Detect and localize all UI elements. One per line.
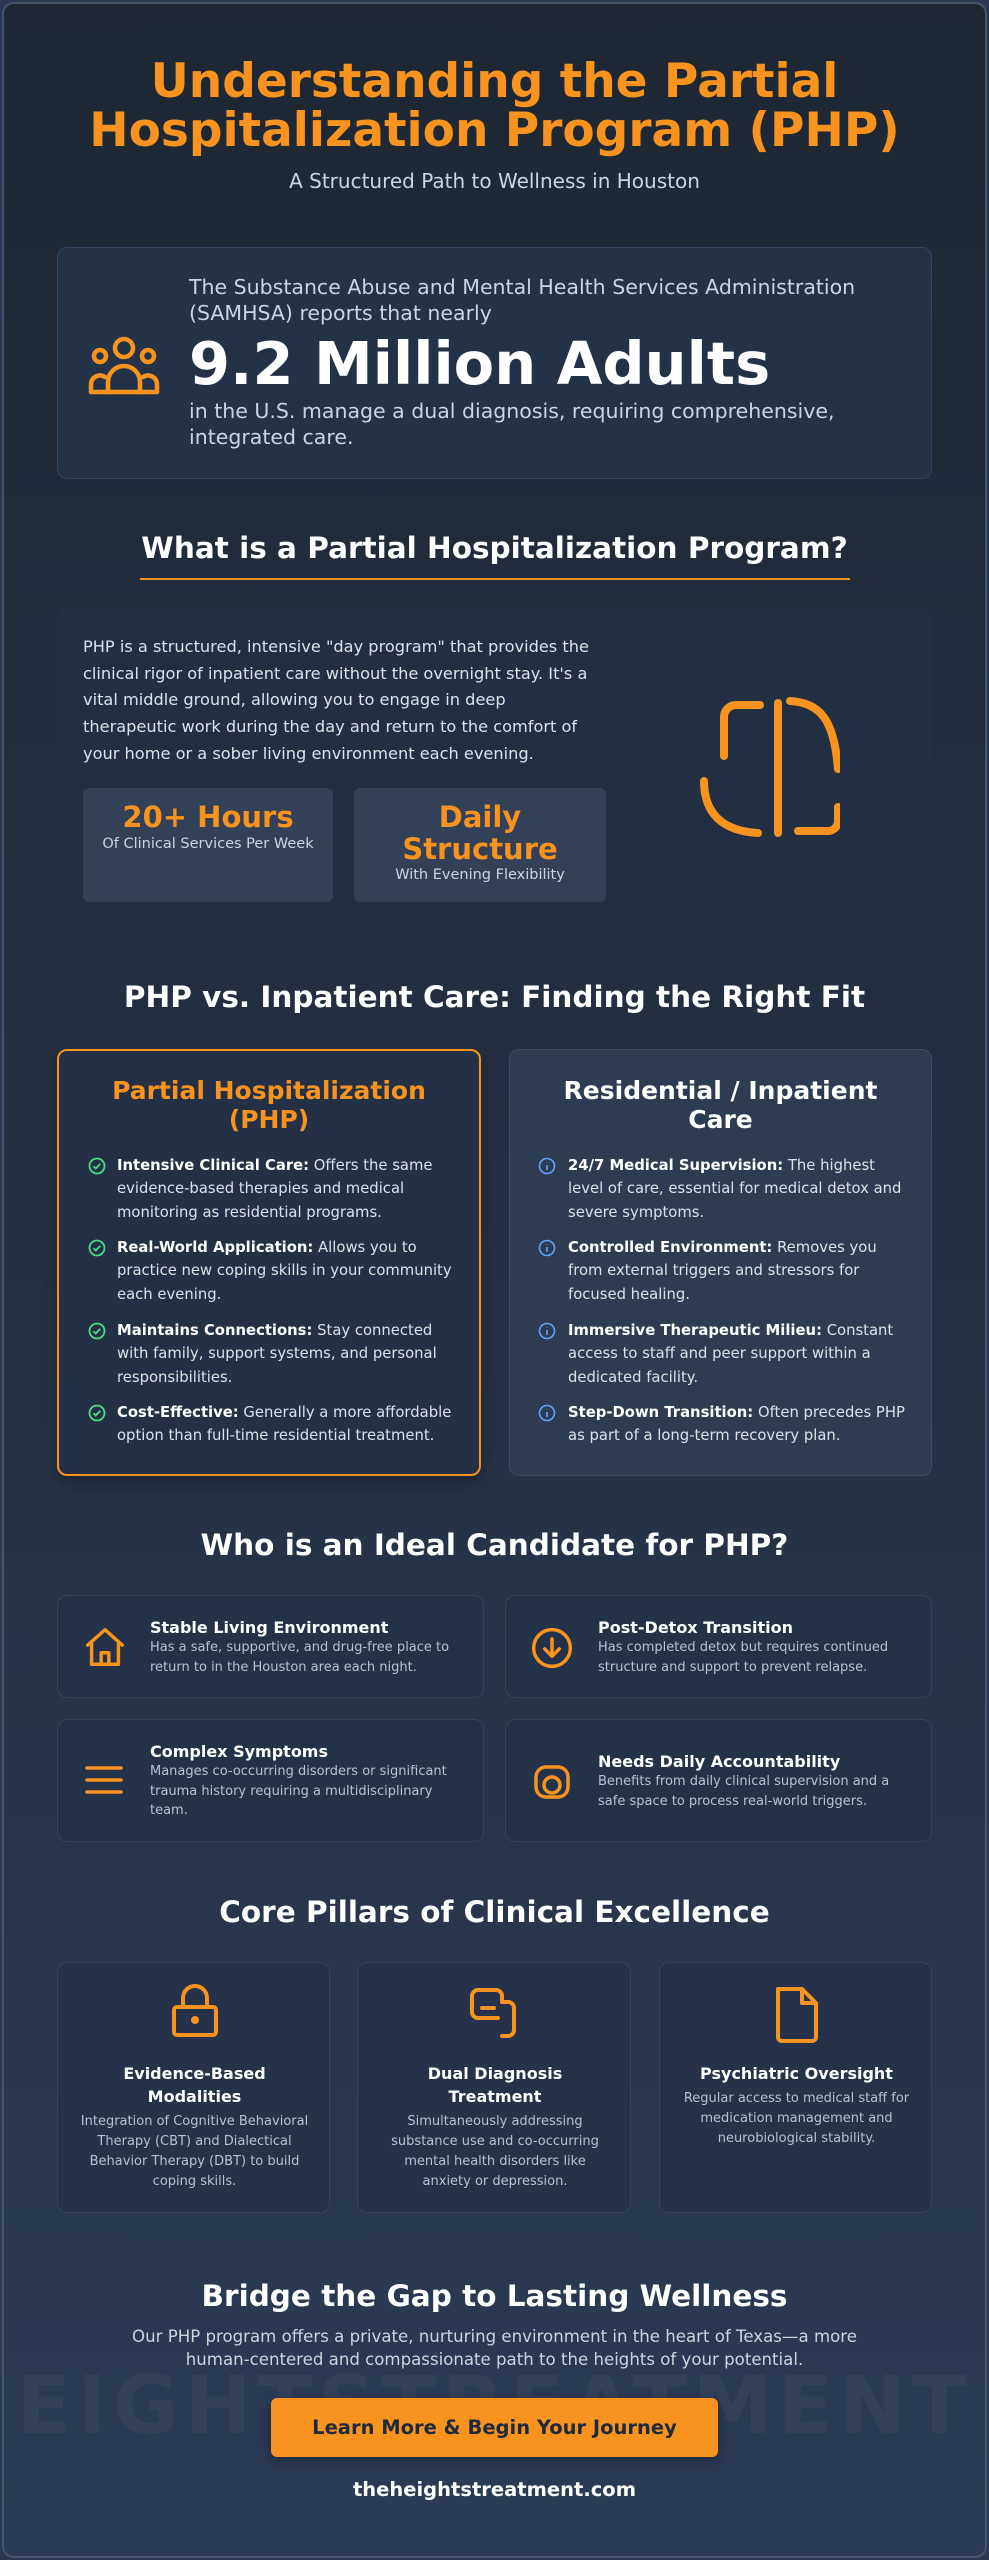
title (89, 54, 900, 158)
list items: Step-Down Transition: Often precedes PHP as part of a long-term recovery plan. (568, 1404, 905, 1444)
card: complex symptoms: Complex Symptoms (150, 1742, 328, 1761)
icon: lock (172, 1984, 218, 2037)
icon: chat (470, 1988, 516, 2038)
list items: Immersive Therapeutic Milieu: Constant access to staff and peer support within a dedicated facility. (568, 1322, 893, 1386)
card: post-detox: Has completed detox but requires continued structure and support to prevent relapse. (598, 1640, 888, 1674)
pillar: dual diagnosis: Treatment (449, 2087, 541, 2106)
icon: people (88, 336, 160, 394)
pillar: evidence-based (57, 1962, 330, 2213)
closing paragraph (132, 2327, 857, 2369)
stat: daily structure: Daily (439, 800, 521, 834)
list items (88, 1157, 452, 1444)
heading: ideal candidate: Who is an Ideal Candidate for PHP? (201, 1528, 788, 1562)
stat: daily structure: With Evening Flexibility (395, 867, 565, 883)
card: post-detox (505, 1595, 932, 1698)
button: CTA: Learn More & Begin Your Journey (312, 2416, 677, 2439)
list items: Intensive Clinical Care: Offers the same evidence-based therapies and medical monitoring as residential programs. (117, 1157, 433, 1221)
card: complex symptoms: Manages co-occurring disorders or significant trauma history requiring a multidisciplinary team. (150, 1764, 447, 1818)
button: CTA (271, 2398, 718, 2457)
icon: lines (85, 1766, 123, 1794)
paragraph: clinical rigor of inpatient care without the overnight stay. It's a (83, 664, 587, 683)
stat: 20+ hours: Of Clinical Services Per Week (102, 836, 314, 852)
card: stable living: Has a safe, supportive, and drug-free place to return to in the Houston area each night. (150, 1640, 449, 1674)
closing paragraph: human-centered and compassionate path to the heights of your potential. (186, 2350, 803, 2369)
card title (564, 1076, 877, 1134)
stat text: The Substance Abuse and Mental Health Services Administration (189, 275, 855, 299)
card title: Care (688, 1105, 753, 1134)
list items: Cost-Effective: Generally a more affordable option than full-time residential treatment. (117, 1404, 451, 1444)
stat text: integrated care. (189, 425, 353, 449)
card title: Partial Hospitalization (112, 1076, 426, 1105)
icon: house (86, 1628, 124, 1666)
title: Understanding the Partial (151, 54, 838, 109)
card title: (PHP) (229, 1105, 309, 1134)
pillar: evidence-based: Evidence-Based (123, 2064, 266, 2083)
icon: arrow down circle (532, 1628, 572, 1668)
paragraph: your home or a sober living environment each evening. (83, 744, 534, 763)
pillar: dual diagnosis: Simultaneously addressing substance use and co-occurring mental health disorders like anxiety or depression. (391, 2114, 599, 2189)
pillar: evidence-based: Modalities (148, 2087, 241, 2106)
closing paragraph: Our PHP program offers a private, nurturing environment in the heart of Texas—a more (132, 2327, 857, 2346)
list items: Real-World Application: Allows you to practice new coping skills in your community each evening. (117, 1239, 452, 1303)
stat: daily structure: Structure (402, 832, 558, 866)
list items: 24/7 Medical Supervision: The highest level of care, essential for medical detox and severe symptoms. (568, 1157, 901, 1221)
url: theheightstreatment.com (353, 2478, 636, 2501)
list items: Maintains Connections: Stay connected with family, support systems, and personal responsibilities. (117, 1322, 437, 1386)
panel: what is PHP (57, 608, 932, 927)
stat: 20+ hours (83, 788, 333, 902)
card title: Residential / Inpatient (564, 1076, 877, 1105)
stat: 20+ hours: 20+ Hours (122, 800, 294, 834)
icon: badge (534, 1765, 570, 1799)
subtitle: A Structured Path to Wellness in Houston (289, 169, 700, 193)
card: accountability: Needs Daily Accountability (598, 1752, 840, 1771)
stat text: (SAMHSA) reports that nearly (189, 301, 492, 325)
pillar: dual diagnosis: Dual Diagnosis (428, 2064, 562, 2083)
heading: bridge: Bridge the Gap to Lasting Wellness (202, 2279, 787, 2313)
panel: residential card (509, 1049, 932, 1476)
stat text: in the U.S. manage a dual diagnosis, requiring comprehensive, (189, 399, 834, 423)
title: Hospitalization Program (PHP) (89, 103, 900, 158)
paragraph: vital middle ground, allowing you to engage in deep (83, 690, 506, 709)
pillar: psychiatric: Regular access to medical staff for medication management and neurobiological stability. (684, 2091, 909, 2146)
heading: vs: PHP vs. Inpatient Care: Finding the Right Fit (124, 980, 865, 1014)
heading: core pillars: Core Pillars of Clinical Excellence (219, 1895, 770, 1929)
card: accountability (505, 1719, 932, 1842)
list items (538, 1157, 905, 1444)
paragraph: therapeutic work during the day and return to the comfort of (83, 717, 577, 736)
pillar: evidence-based: Integration of Cognitive Behavioral Therapy (CBT) and Dialectical Behavior Therapy (DBT) to build coping skills. (81, 2114, 308, 2189)
paragraph: PHP is a structured, intensive "day program" that provides the (83, 637, 589, 656)
panel: statistic (57, 247, 932, 479)
card: stable living (57, 1595, 484, 1698)
pillar: dual diagnosis (357, 1962, 631, 2213)
icon: brain (700, 697, 840, 837)
card: complex symptoms (57, 1719, 484, 1842)
stat text (188, 275, 855, 449)
card: stable living: Stable Living Environment (150, 1618, 388, 1637)
card title (112, 1076, 426, 1134)
icon: document (776, 1987, 818, 2043)
pillar: psychiatric: Psychiatric Oversight (700, 2064, 893, 2083)
stat text: 9.2 Million Adults (189, 329, 770, 398)
heading: what is PHP: What is a Partial Hospitalization Program? (141, 531, 848, 565)
pillar: psychiatric (659, 1962, 932, 2213)
stat: daily structure (354, 788, 606, 902)
card: post-detox: Post-Detox Transition (598, 1618, 793, 1637)
paragraph (83, 637, 589, 763)
list items: Controlled Environment: Removes you from external triggers and stressors for focused healing. (568, 1239, 877, 1303)
card: accountability: Benefits from daily clinical supervision and a safe space to process real-world triggers. (598, 1774, 889, 1808)
panel: PHP card (57, 1049, 481, 1476)
